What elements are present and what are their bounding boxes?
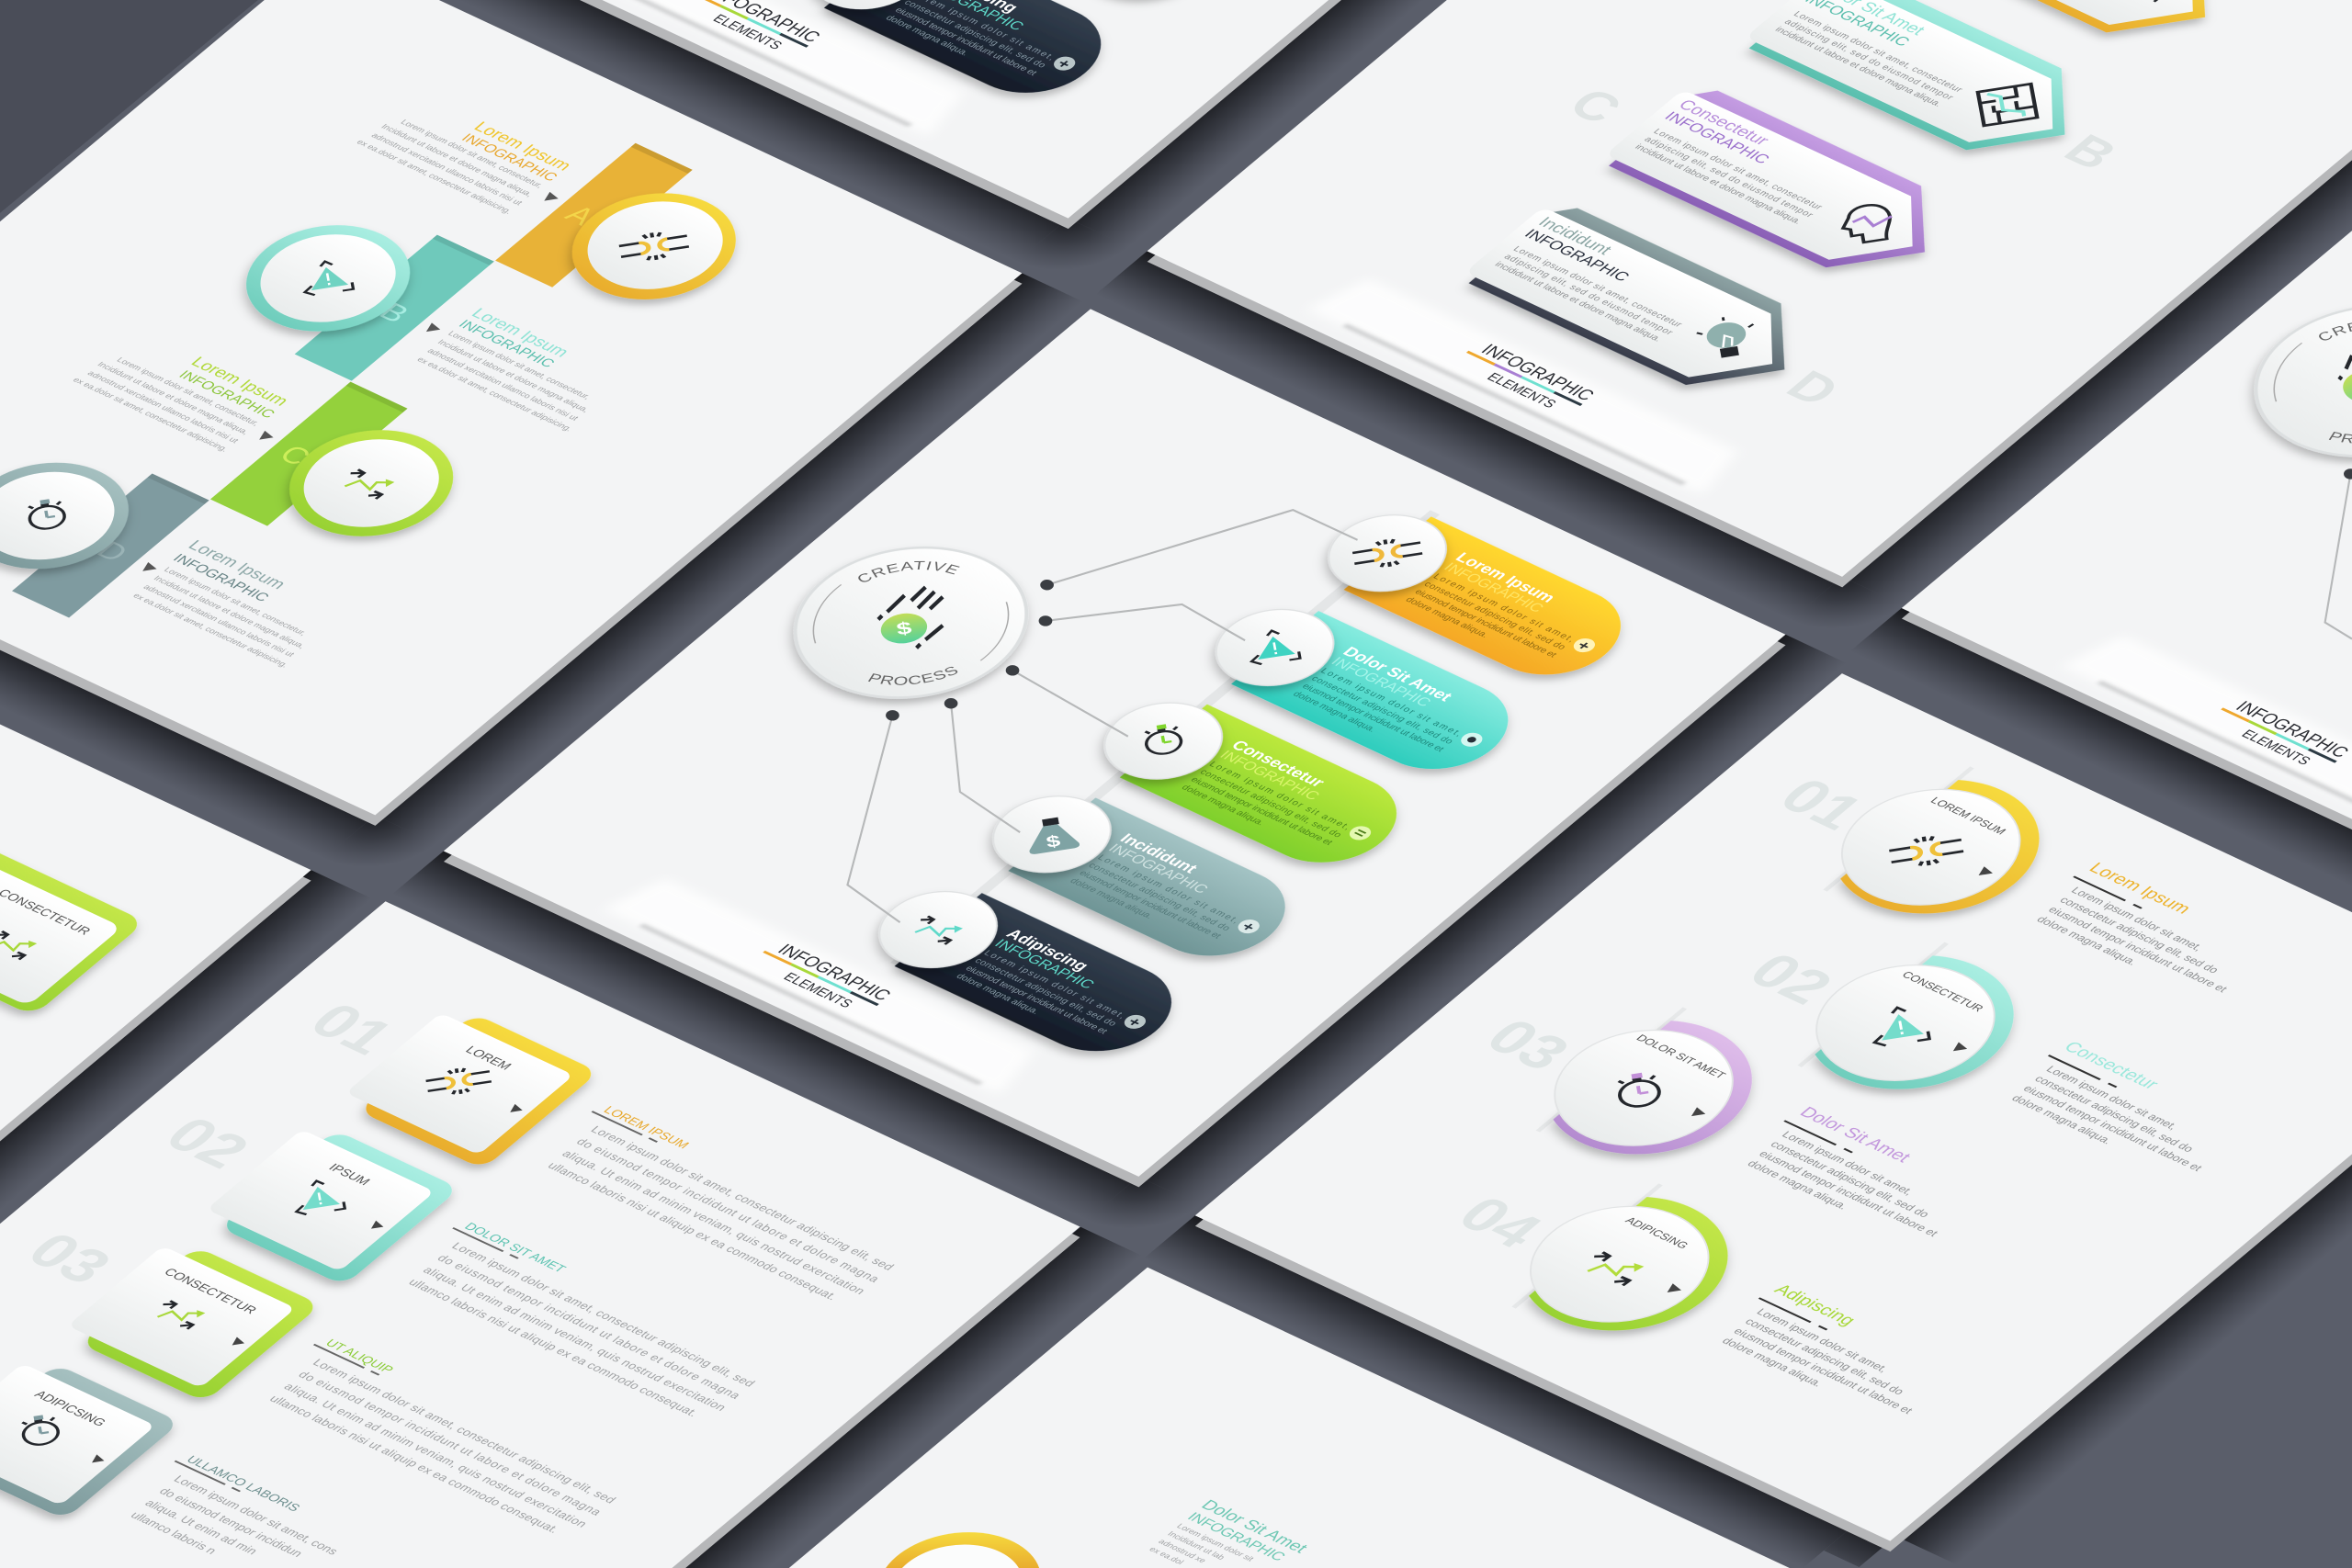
text: Dolor Sit Amet: adnostrud xe: [1157, 1538, 1208, 1564]
panel: far right sheet: [1857, 231, 2352, 981]
panel: top right sheet with arrow cards: [1139, 0, 2352, 587]
pill: Adipiscing: eiusmod tempor incididunt ut labore et: [963, 964, 1109, 1036]
big circle: creative process: [785, 546, 1033, 708]
big circle: [2245, 308, 2352, 467]
text: Dolor Sit Amet: ex ea.dol: [1148, 1545, 1186, 1566]
pill: Incididunt: eiusmod tempor incididunt ut labore et: [1077, 869, 1223, 941]
pill: Adipiscing: dolore magna aliqua.: [954, 972, 1041, 1016]
text: step C: [71, 324, 312, 463]
text: step C: Lorem ipsum dolor sit amet, consectetur,: [115, 356, 261, 427]
numbers: 03: [14, 1223, 126, 1293]
pill: Adipiscing: [824, 0, 1128, 109]
text: step B: adnostrud xercitation ullamco laboris nisi ut: [425, 347, 581, 423]
text: Lorem Ipsum: do eiusmod tempor incididunt ut labore et dolore magna: [573, 1135, 884, 1285]
text: step 02: eiusmod tempor incididunt ut labore et: [2020, 1083, 2205, 1174]
text: step 02: consectetur adipiscing elit, sed do: [2032, 1074, 2197, 1155]
card: LOREM: LOREM: [463, 1043, 515, 1072]
numbers: 03: [1472, 1009, 1584, 1080]
footer badge: [532, 0, 975, 137]
card: CONSECTETUR: [58, 1236, 321, 1402]
pill: Incididunt: [1008, 797, 1313, 973]
watermark letters: C: [1557, 80, 1634, 132]
card: IPSUM: IPSUM: [326, 1161, 374, 1188]
card: C purple: INFOGRAPHIC: [1661, 108, 1774, 166]
pill: Incididunt: Incididunt: [1116, 830, 1202, 876]
card: C purple: incididunt ut labore et dolore magna aliqua.: [1633, 143, 1804, 226]
text: step 01: consectetur adipiscing elit, sed do: [2057, 895, 2222, 976]
pill: Adipiscing: eiusmod tempor incididunt ut labore et: [892, 6, 1039, 77]
card: C purple: [1598, 80, 1974, 291]
text: step 01: Lorem ipsum dolor sit amet,: [2068, 885, 2206, 953]
step 04: ADIPICSING: [1623, 1215, 1691, 1251]
text: step 02: [1999, 1037, 2256, 1183]
icon circle: stopwatch: [1080, 688, 1246, 794]
pill: Lorem Ipsum: +: [1573, 637, 1595, 654]
step 03: DOLOR SIT AMET: [1634, 1032, 1729, 1081]
pill: Adipiscing: [895, 893, 1199, 1068]
pill: Dolor Sit Amet: eiusmod tempor incididunt ut labore et: [1299, 682, 1446, 754]
watermark letters: B: [2052, 126, 2130, 178]
panel: left edge sheet: [0, 545, 319, 1423]
icon: head: [1839, 202, 1895, 245]
pill: Incididunt: consectetur adipiscing elit, sed do: [1086, 862, 1232, 933]
text: Ullamco Laboris: ULLAMCO LABORIS: [184, 1453, 304, 1514]
panel: top-left sheet with A B C D steps: [0, 0, 1030, 826]
big circle: creative process: PROCESS: [868, 667, 957, 685]
text: step 04: consectetur adipiscing elit, sed do: [1742, 1316, 1907, 1397]
card: C purple: Lorem ipsum dolor sit amet, consectetur: [1651, 128, 1825, 212]
text: step A: adnostrud xercitation ullamco laboris nisi ut: [369, 131, 525, 207]
text: step D: INFOGRAPHIC: [169, 552, 272, 604]
text: step 03: Dolor Sit Amet: [1795, 1104, 1916, 1166]
pill: Consectetur: consectetur adipiscing elit, sed do: [1197, 768, 1344, 840]
text: Ullamco Laboris: ullamco laboris n: [128, 1509, 220, 1556]
panel: top center sheet: [365, 0, 1724, 229]
text: Dolor Sit Amet: DOLOR SIT AMET: [461, 1220, 570, 1275]
pill: Adipiscing: INFOGRAPHIC: [991, 937, 1098, 992]
pill: Dolor Sit Amet: INFOGRAPHIC: [1328, 655, 1434, 709]
pill: Dolor Sit Amet: Dolor Sit Amet: [1340, 644, 1456, 704]
step B: B: [372, 298, 417, 328]
text: Dolor Sit Amet: aliqua. Ut enim ad minim veniam, quis nostrud exercitation: [420, 1264, 729, 1413]
text: step C: Incididunt ut labore et dolore magna aliqua,: [96, 360, 251, 435]
pill: Lorem Ipsum: INFOGRAPHIC: [1441, 560, 1547, 615]
text: Lorem Ipsum: [531, 1100, 918, 1309]
card: B teal: [1738, 0, 2114, 175]
card: CONSECTETUR: CONSECTETUR: [162, 1266, 260, 1316]
pill: Adipiscing: +: [1124, 1014, 1146, 1030]
pill: Lorem Ipsum: [1344, 516, 1648, 692]
card: ADIPICSING: ADIPICSING: [31, 1388, 109, 1428]
card: C purple: adipiscing elit, sed do eiusmod tempor: [1642, 135, 1815, 220]
pill: Lorem Ipsum: Lorem Ipsum: [1452, 549, 1559, 605]
pill: Consectetur: INFOGRAPHIC: [1216, 748, 1323, 803]
text: Dolor Sit Amet: Lorem ipsum dolor sit amet, consectetur adipiscing elit, sed: [449, 1240, 758, 1389]
pill: Lorem Ipsum: dolore magna aliqua.: [1403, 596, 1490, 639]
pill: Adipiscing: consectetur adipiscing elit, sed do: [972, 957, 1118, 1028]
pill: Consectetur: eiusmod tempor incididunt ut labore et: [1188, 776, 1334, 847]
footer badge: ELEMENTS: [2238, 728, 2313, 768]
text: step B: INFOGRAPHIC: [455, 318, 558, 370]
card: Consectetur: [0, 837, 146, 1016]
icon circle: chart: [855, 877, 1021, 982]
footer badge: INFOGRAPHIC: [1476, 342, 1598, 404]
text: step A: INFOGRAPHIC: [458, 131, 560, 184]
text: step 01: [2025, 858, 2280, 1004]
text: step D: Lorem Ipsum: [185, 537, 290, 592]
pill: Lorem Ipsum: consectetur adipiscing elit, sed do: [1421, 581, 1567, 652]
pill: Consectetur: dolore magna aliqua.: [1179, 784, 1266, 828]
text: step 04: Lorem ipsum dolor sit amet,: [1754, 1306, 1891, 1374]
card: D slate: Lorem ipsum dolor sit amet, consectetur: [1510, 245, 1684, 330]
text: step A: ex ea.dolor sit amet, consectetur adipisicing.: [355, 138, 514, 215]
text: Ut Aliquip: Lorem ipsum dolor sit amet, consectetur adipiscing elit, sed: [310, 1357, 619, 1506]
numbers: 04: [1444, 1187, 1556, 1258]
card: D slate: Incididunt: [1534, 214, 1617, 258]
text: step A: Lorem ipsum dolor sit amet, consectetur,: [399, 118, 545, 189]
card: B teal: incididunt ut labore et dolore magna aliqua.: [1772, 26, 1944, 108]
icon circle: money bag: $: [1045, 831, 1062, 852]
text: step 01: dolore magna aliqua.: [2034, 914, 2140, 967]
step 04: [1480, 1168, 1777, 1362]
text: Dolor Sit Amet: Dolor Sit Amet: [1197, 1496, 1313, 1556]
text: step 03: [1736, 1102, 1992, 1248]
text: step C: INFOGRAPHIC: [175, 368, 277, 421]
icon: maze: [1978, 84, 2037, 126]
text: step 04: dolore magna aliqua.: [1719, 1336, 1826, 1389]
text: Ullamco Laboris: aliqua. Ut enim ad min: [142, 1497, 261, 1557]
text: step B: Lorem ipsum dolor sit amet, consectetur,: [447, 330, 593, 400]
footer badge: ELEMENTS: [709, 12, 786, 52]
text: step D: ex ea.dolor sit amet, consectetur adipisicing.: [131, 592, 290, 669]
card: D slate: INFOGRAPHIC: [1521, 226, 1634, 284]
text: step 04: [1710, 1280, 1966, 1426]
icon: dashes around money coin: [878, 587, 943, 648]
text: step A: Lorem Ipsum: [470, 118, 576, 174]
text: Ut Aliquip: ullamco laboris nisi ut aliquip ex ea commodo consequat.: [266, 1393, 562, 1535]
pill: Incididunt: dolore magna aliqua.: [1068, 877, 1155, 920]
step 02: CONSECTETUR: [1899, 969, 1986, 1014]
card: LOREM: [336, 1003, 599, 1169]
text: Lorem Ipsum: ullamco laboris nisi ut aliquip ex ea commodo consequat.: [545, 1160, 841, 1303]
footer badge: [2061, 627, 2352, 852]
footer badge: ELEMENTS: [780, 971, 855, 1010]
pill: Incididunt: INFOGRAPHIC: [1104, 841, 1212, 897]
step 03: [1505, 992, 1801, 1186]
text: step C: Lorem Ipsum: [187, 354, 293, 409]
circle: partial yellow: [886, 1532, 1039, 1568]
text: Ut Aliquip: do eiusmod tempor incididunt ut labore et dolore magna: [296, 1369, 605, 1517]
big circle: creative process: $: [895, 618, 913, 639]
icon circle: triangle: [1193, 594, 1358, 700]
panel: bottom center sheet: [789, 1268, 1790, 1568]
card: A yellow: [1878, 0, 2255, 57]
pill: Consectetur: =: [1349, 825, 1372, 840]
pill: Dolor Sit Amet: Lorem ipsum dolor sit amet,: [1318, 667, 1464, 739]
circle node: [785, 0, 950, 24]
pill: Incididunt: +: [1237, 919, 1260, 935]
pill: Adipiscing: Lorem ipsum dolor sit amet,: [981, 949, 1127, 1021]
pill: Incididunt: Lorem ipsum dolor sit amet,: [1095, 853, 1241, 925]
big circle: creative process: CREATIVE: [858, 560, 960, 582]
connector lines with dots: [847, 468, 2352, 922]
icon: bulb: [1695, 313, 1758, 361]
footer badge: INFOGRAPHIC: [773, 942, 895, 1004]
text: step 02: dolore magna aliqua.: [2009, 1093, 2115, 1146]
text: Ut Aliquip: [254, 1334, 640, 1541]
text: step D: Lorem ipsum dolor sit amet, consectetur,: [162, 566, 309, 637]
text: step 03: consectetur adipiscing elit, sed do: [1768, 1139, 1932, 1220]
text: step D: [111, 529, 354, 669]
icon circle: money bag: [969, 782, 1135, 887]
text: step 04: eiusmod tempor incididunt ut labore et: [1731, 1325, 1916, 1416]
watermark letters: [1419, 0, 2132, 414]
text: step 03: Lorem ipsum dolor sit amet,: [1779, 1129, 1917, 1197]
text: step B: Lorem Ipsum: [468, 305, 573, 360]
footer badge: ELEMENTS: [1484, 371, 1559, 411]
text: Lorem Ipsum: aliqua. Ut enim ad minim veniam, quis nostrud exercitation: [560, 1147, 868, 1296]
text: step A: Incididunt ut labore et dolore magna aliqua,: [379, 122, 535, 198]
icon: partial coin and dashes on far right circle: [2339, 355, 2352, 402]
pill: slate partial: [938, 0, 1242, 15]
text: step 03: eiusmod tempor incididunt ut labore et: [1756, 1148, 1941, 1239]
text: Ut Aliquip: UT ALIQUIP: [322, 1337, 397, 1376]
text: Dolor Sit Amet: Incididunt ut lab: [1166, 1530, 1227, 1562]
text: Ullamco Laboris: Lorem ipsum dolor sit amet, cons: [171, 1473, 342, 1557]
numbers: [1327, 766, 1992, 1258]
footer badge: [1306, 271, 1748, 495]
numbers: [14, 990, 408, 1296]
icon circle: link: [1305, 501, 1470, 606]
text: Dolor Sit Amet: Lorem ipsum dolor sit: [1175, 1522, 1256, 1562]
text: step B: [392, 294, 635, 433]
text: step 03: dolore magna aliqua.: [1745, 1158, 1850, 1212]
connector spine: [890, 510, 1440, 967]
card: B teal: Lorem ipsum dolor sit amet, consectetur: [1791, 10, 1965, 95]
text: step 01: eiusmod tempor incididunt ut labore et: [2045, 904, 2231, 995]
step A: [495, 143, 789, 333]
pill: Dolor Sit Amet: consectetur adipiscing elit, sed do: [1309, 674, 1455, 746]
text: step B: Incididunt ut labore et dolore magna aliqua,: [435, 338, 591, 413]
panel: center sheet with creative process: [399, 309, 1830, 1220]
watermark letters: D: [1775, 362, 1852, 414]
text: step D: Incididunt ut labore et dolore magna aliqua,: [152, 574, 307, 649]
text: step A: [355, 88, 594, 225]
footer badge: [603, 871, 1046, 1095]
step B: [196, 188, 494, 381]
text: Dolor Sit Amet: do eiusmod tempor incididunt ut labore et dolore magna: [435, 1252, 744, 1401]
card: IPSUM: [198, 1120, 460, 1286]
text: step 02: Consectetur: [2060, 1039, 2163, 1093]
pill: Adipiscing: dolore magna aliqua.: [883, 14, 971, 58]
text: Ut Aliquip: aliqua. Ut enim ad minim veniam, quis nostrud exercitation: [281, 1381, 591, 1529]
text: Dolor Sit Amet: ullamco laboris nisi ut aliquip ex ea commodo consequat.: [406, 1276, 701, 1418]
step 02: [1767, 928, 2063, 1121]
pill: Consectetur: [1120, 705, 1424, 879]
text: Ullamco Laboris: [128, 1453, 342, 1559]
step 01: LOREM IPSUM: [1928, 795, 2008, 837]
numbers: 02: [1736, 942, 1847, 1014]
pill: Adipiscing: consectetur adipiscing elit, sed do: [901, 0, 1048, 70]
pill: Adipiscing: Adipiscing: [1002, 926, 1092, 974]
text: Dolor Sit Amet: [1148, 1496, 1313, 1566]
text: Lorem Ipsum: Lorem ipsum dolor sit amet, consectetur adipiscing elit, sed: [588, 1123, 897, 1272]
step A: A: [559, 199, 603, 231]
numbers: 01: [1766, 768, 1878, 840]
step C: C: [273, 439, 318, 470]
pill: Lorem Ipsum: eiusmod tempor incididunt ut labore et: [1412, 588, 1558, 660]
card: D slate: incididunt ut labore et dolore magna aliqua.: [1492, 261, 1663, 344]
step 01: [1792, 751, 2088, 945]
panel: bottom left sheet with square cards: [0, 901, 1080, 1568]
card: ADIPICSING: [0, 1354, 181, 1519]
text: step C: ex ea.dolor sit amet, consectetur adipisicing.: [71, 376, 231, 453]
text: Dolor Sit Amet: INFOGRAPHIC: [1183, 1510, 1289, 1564]
card: C purple: Consectetur: [1675, 96, 1773, 148]
card: D slate: [1458, 197, 1834, 409]
text: step C: adnostrud xercitation ullamco laboris nisi ut: [85, 369, 241, 445]
text: step 04: Adipiscing: [1770, 1281, 1860, 1329]
step D: D: [90, 536, 136, 567]
numbers: 02: [152, 1107, 264, 1179]
step D: [0, 428, 209, 617]
numbers: 01: [296, 993, 408, 1065]
pill: Dolor Sit Amet: dolore magna aliqua.: [1290, 690, 1378, 734]
pill: Consectetur: Lorem ipsum dolor sit amet,: [1206, 761, 1352, 831]
text: Lorem Ipsum: LOREM IPSUM: [601, 1103, 693, 1151]
pill: Adipiscing: +: [1053, 56, 1076, 72]
text: step 01: Lorem Ipsum: [2085, 860, 2195, 918]
text: step B: ex ea.dolor sit amet, consectetur adipisicing.: [415, 355, 574, 433]
text: Ullamco Laboris: do eiusmod tempor incididun: [156, 1485, 306, 1559]
pill: Consectetur: Consectetur: [1227, 738, 1329, 790]
step C: [210, 382, 503, 571]
text: Dolor Sit Amet: [392, 1217, 779, 1426]
text: step D: adnostrud xercitation ullamco laboris nisi ut: [141, 583, 297, 659]
text: step 02: Lorem ipsum dolor sit amet,: [2043, 1064, 2180, 1132]
pill: Lorem Ipsum: Lorem ipsum dolor sit amet,: [1430, 572, 1577, 644]
card: B teal: adipiscing elit, sed do eiusmod tempor: [1781, 17, 1956, 102]
pill: Dolor Sit Amet: [1231, 611, 1535, 785]
panel: lower right sheet with numbered circles: [1187, 673, 2352, 1551]
card: D slate: adipiscing elit, sed do eiusmod tempor: [1501, 253, 1675, 337]
